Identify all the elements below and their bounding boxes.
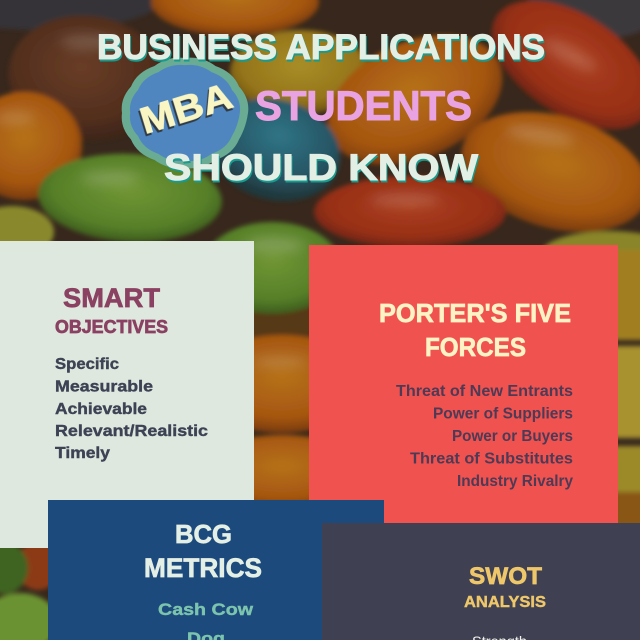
panel: SMART objectives: Timely (55, 445, 110, 462)
panel: SMART objectives: Specific (55, 356, 119, 373)
badge: scalloped MBA seal: MBA (135, 75, 237, 142)
panel: SMART objectives: Relevant/Realistic (55, 423, 208, 440)
panel: Porter's Five Forces: PORTER'S FIVE (379, 298, 571, 328)
panel: SWOT analysis: SWOT (469, 563, 542, 590)
panel: Porter's Five Forces: Threat of Substitutes (410, 450, 573, 468)
panel: Porter's Five Forces: Power or Buyers (452, 428, 573, 445)
panel: Porter's Five Forces: Industry Rivalry (457, 473, 573, 490)
panel: Porter's Five Forces: Threat of New Entrants (396, 383, 573, 400)
panel: SMART objectives: Achievable (55, 401, 147, 418)
panel: BCG metrics (48, 500, 384, 640)
panel: BCG metrics: BCG (175, 519, 232, 549)
panel: SWOT analysis (322, 523, 640, 640)
panel: Porter's Five Forces (309, 245, 618, 524)
panel: SMART objectives: OBJECTIVES (55, 317, 168, 337)
badge: scalloped MBA seal (122, 58, 248, 168)
panel: SMART objectives: Measurable (55, 378, 153, 396)
title: SHOULD KNOW (164, 147, 478, 188)
title (97, 28, 545, 188)
panel: BCG metrics: METRICS (144, 553, 262, 583)
panel: BCG metrics: Cash Cow (158, 600, 254, 619)
title: BUSINESS APPLICATIONS (97, 28, 545, 67)
panel: SMART objectives: SMART (63, 283, 161, 313)
title: STUDENTS (255, 82, 472, 129)
panel: Porter's Five Forces: FORCES (425, 332, 526, 362)
panel: Porter's Five Forces: Power of Suppliers (433, 406, 573, 422)
panel: SMART objectives (0, 241, 254, 548)
panel: SWOT analysis: ANALYSIS (464, 594, 546, 611)
